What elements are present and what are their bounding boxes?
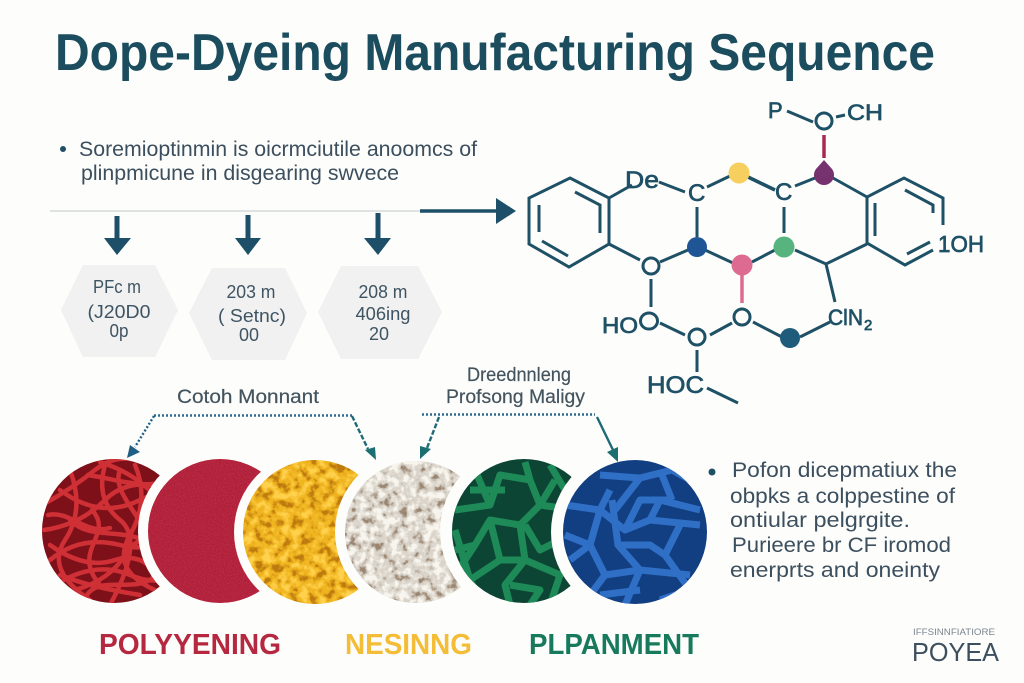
dotted connector: Cotoh Monnant — [127, 416, 376, 460]
atom labels: De — [625, 167, 659, 194]
crimson stem — [822, 135, 826, 158]
brand logo: IFFSINNFIATIORE — [913, 627, 995, 637]
label: Dreednnleng Profsong Maligy: Profsong Maligy — [446, 387, 586, 408]
intro text block: Soremioptinmin is oicrmciutile anoomcs of — [79, 138, 477, 161]
intro text block: plinpmicune in disgearing swvece — [81, 162, 399, 185]
hexagon: step 2: 00 — [239, 325, 259, 345]
swatch: blue fibres — [551, 460, 707, 604]
brand logo: POYEA — [912, 637, 1000, 667]
dotted connector: Dreednnleng — [420, 414, 618, 462]
arrow: to molecule — [420, 198, 516, 224]
hexagon: step 3: 406ing — [356, 304, 410, 324]
swatch: yellow granules — [234, 451, 396, 613]
atom labels: HO — [602, 313, 638, 338]
left benzene ring — [529, 178, 609, 267]
hexagon: step 1: PFc m — [93, 277, 141, 297]
atom: blue — [687, 237, 707, 257]
atom labels: 2 — [864, 317, 872, 334]
right text block: ontiular pelgrgite. — [730, 509, 910, 532]
atom: pink — [732, 254, 752, 276]
bottom label: polyyening: POLYYENING — [99, 629, 281, 661]
bottom label: plpanment: PLPANMENT — [529, 629, 699, 661]
swatch: green fibres — [440, 459, 572, 603]
oxygen rings — [640, 113, 832, 345]
atom: green — [774, 236, 794, 258]
bottom label: nesinng: NESINNG — [345, 629, 472, 661]
chemical structure diagram — [529, 98, 984, 403]
hexagon: step 1: (J20D0 — [88, 302, 150, 322]
swatch: white granules — [335, 451, 497, 613]
label: Dreednnleng Profsong Maligy: Dreednnleng — [467, 365, 571, 386]
atom labels: ClN — [828, 305, 863, 330]
atom: yellow — [728, 162, 750, 184]
atom labels: CH — [847, 100, 883, 125]
hexagon: step 2: 203 m — [226, 282, 276, 302]
atom labels: C — [775, 179, 792, 206]
arrow: down to step 3 — [364, 213, 391, 255]
atom: purple — [814, 160, 834, 185]
right text block: enerprts and oneinty — [730, 559, 941, 582]
arrow: down to step 1 — [104, 216, 131, 255]
hexagon: step 2: ( Setnc) — [218, 306, 286, 326]
hexagon: step 2 — [189, 268, 307, 360]
swatch: red powder — [138, 449, 302, 613]
molecular bonds — [609, 111, 867, 403]
atom labels: C — [688, 180, 705, 207]
title: Dope-Dyeing Manufacturing Sequence — [55, 24, 935, 82]
atom labels: P — [768, 98, 783, 123]
right text block: obpks a colppestine of — [730, 485, 955, 508]
swatch: red fibres — [42, 459, 160, 603]
atom: dark teal — [780, 328, 800, 348]
right benzene ring — [867, 178, 943, 265]
right text block: Purieere br CF iromod — [732, 534, 951, 557]
atom labels — [602, 98, 984, 399]
atom labels: HOC — [647, 372, 704, 399]
hexagon: step 1: 0p — [110, 321, 128, 341]
hexagon: step 3: 208 m — [358, 282, 408, 302]
intro text block — [60, 138, 477, 185]
right text block: Pofon dicepmatiux the — [732, 459, 957, 482]
label: Dreednnleng Profsong Maligy — [446, 365, 586, 408]
pink stem — [740, 272, 744, 303]
hexagon: step 1 — [61, 265, 178, 357]
arrow: down to step 2 — [235, 215, 261, 255]
atom labels: 1OH — [938, 231, 984, 257]
hexagon: step 3 — [318, 266, 442, 359]
right text block — [708, 459, 957, 582]
label: Cotoh Monnant: Cotoh Monnant — [177, 387, 320, 408]
hexagon: step 3: 20 — [369, 324, 389, 344]
